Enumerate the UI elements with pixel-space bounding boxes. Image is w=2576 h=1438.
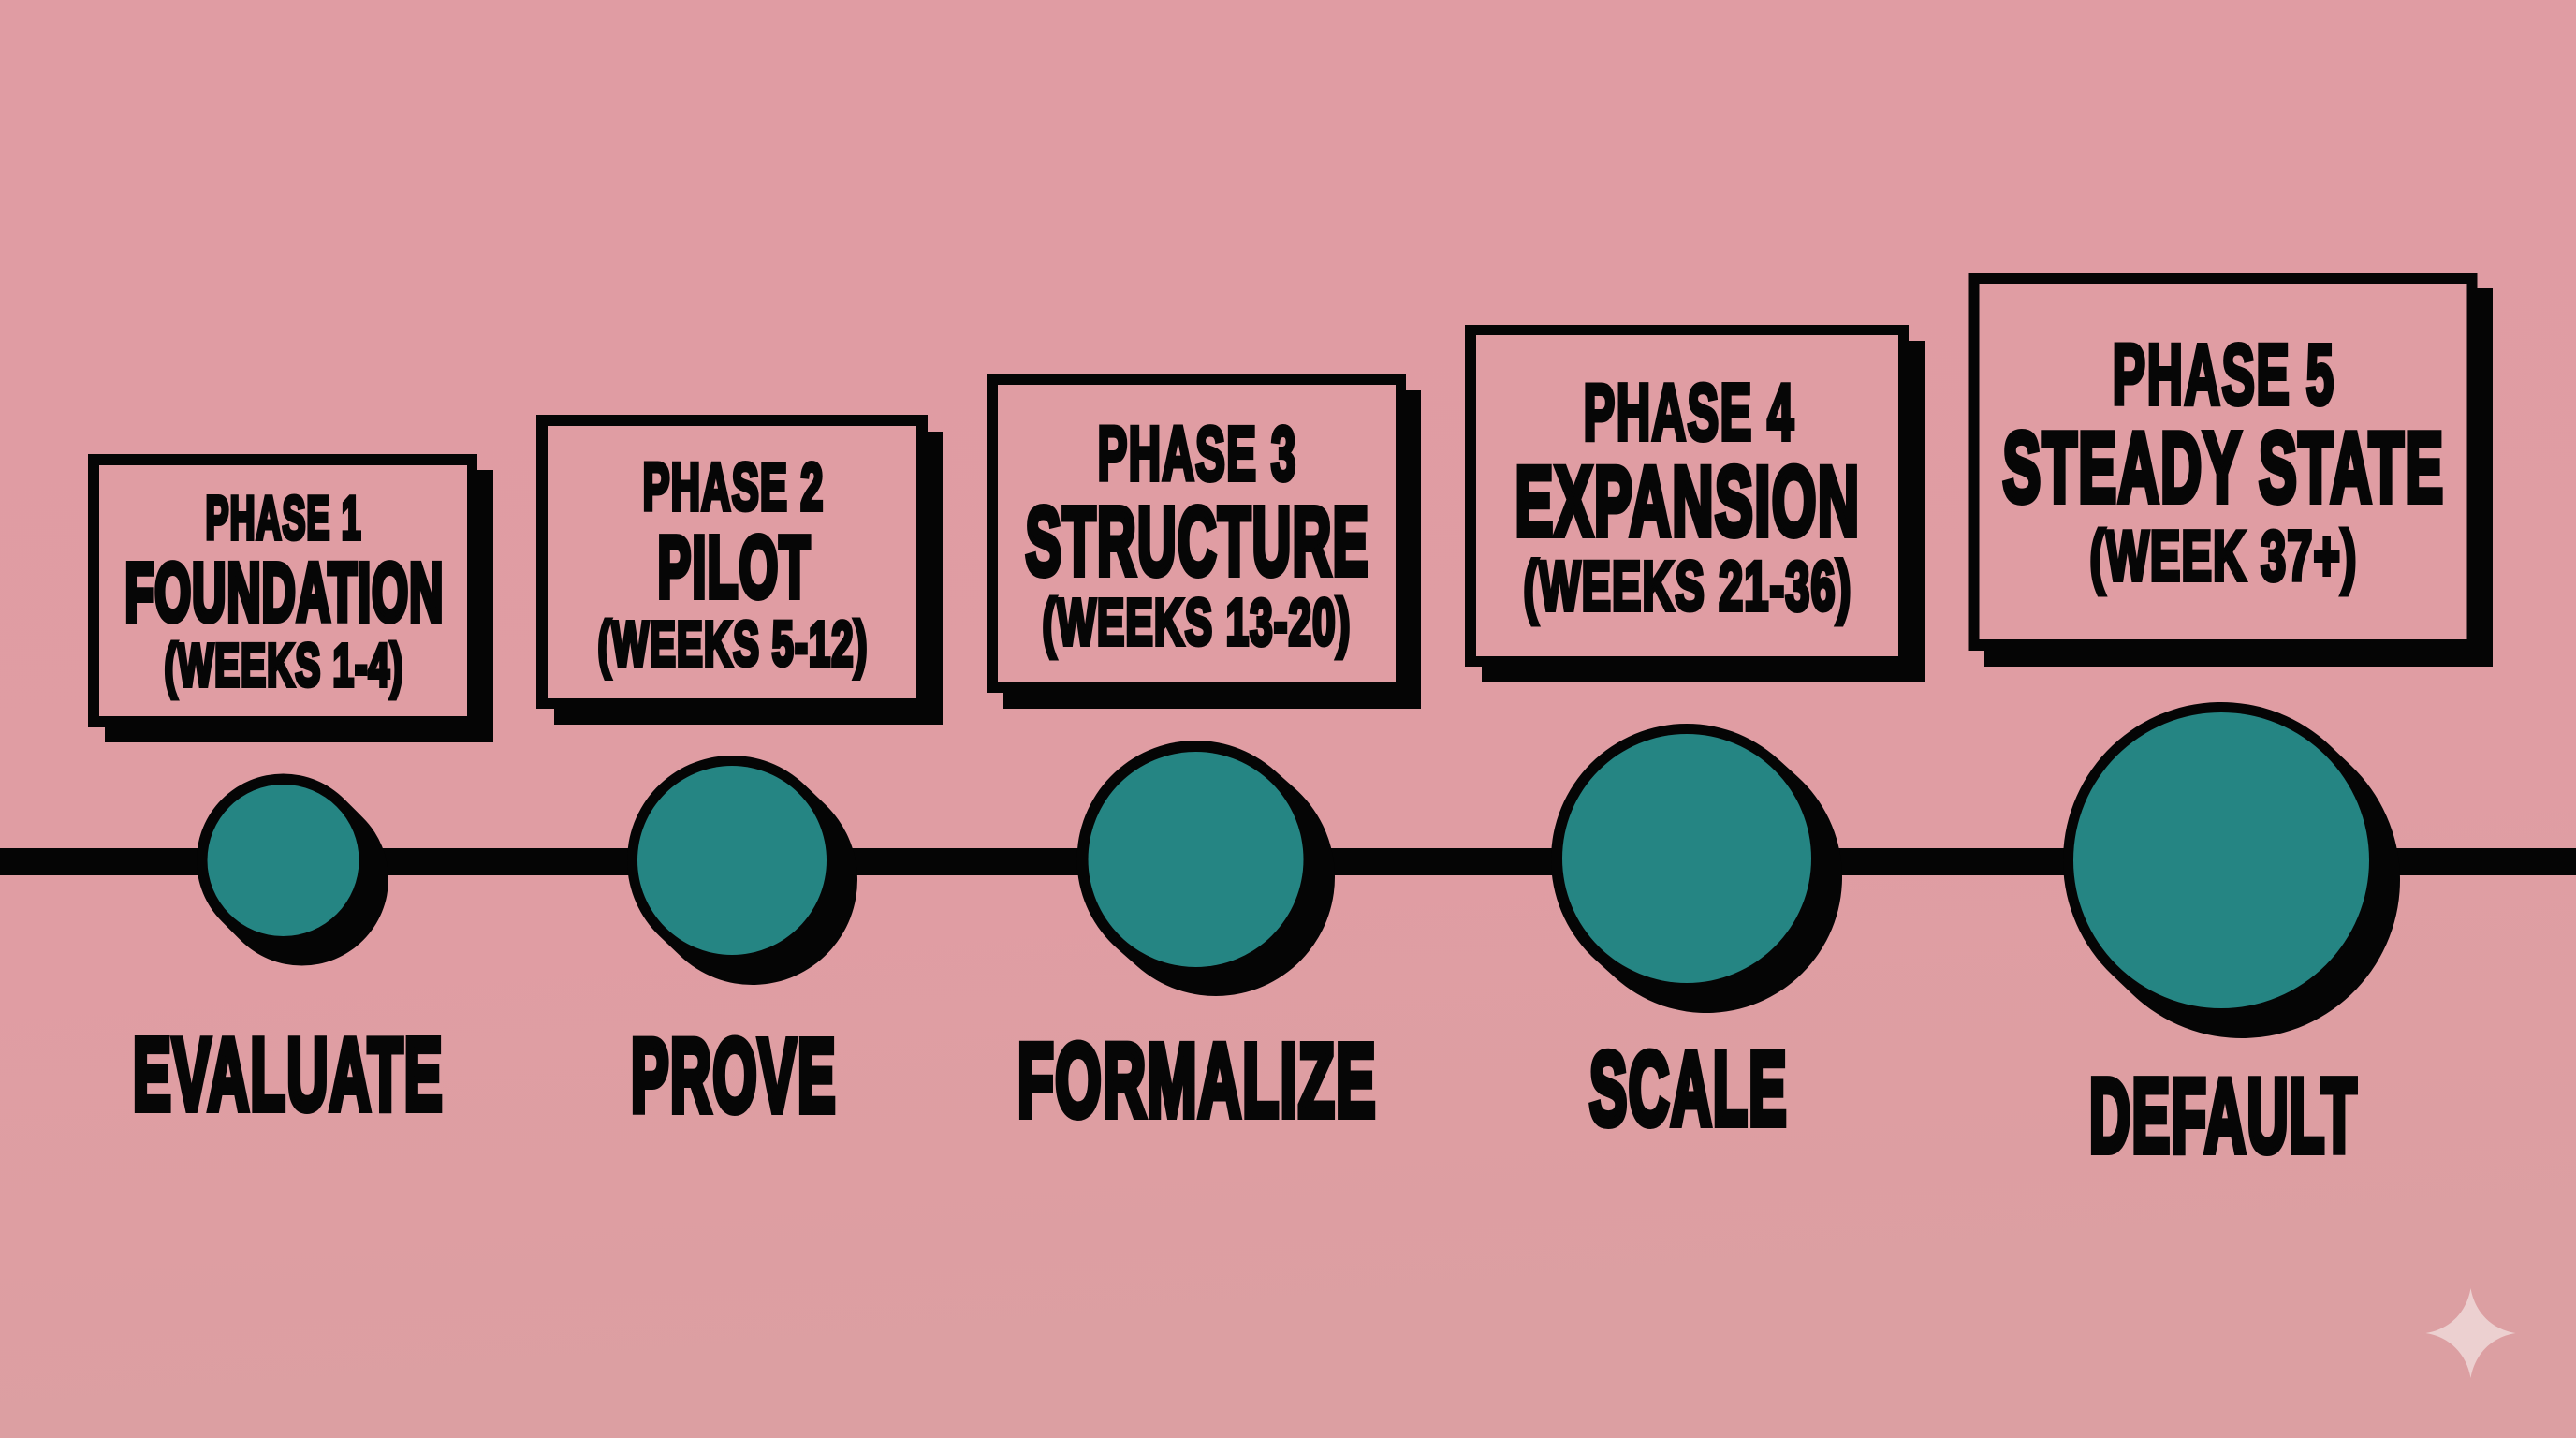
phase 4 label: SCALE	[1589, 1032, 1788, 1147]
phase 2 node	[637, 766, 827, 955]
phase 2 label: PROVE	[631, 1019, 837, 1134]
phase 3 weeks: (WEEKS 13-20)	[1043, 586, 1352, 659]
phase 4 number: PHASE 4	[1584, 367, 1795, 457]
phase 4 name: EXPANSION	[1515, 448, 1861, 556]
phase 2 weeks: (WEEKS 5-12)	[597, 610, 869, 680]
phase 4 node	[1562, 734, 1811, 983]
phase 3 label: FORMALIZE	[1017, 1023, 1377, 1138]
phase 5 group	[1968, 273, 2493, 1174]
phase 2 name: PILOT	[657, 519, 811, 616]
phase 5 number: PHASE 5	[2112, 328, 2334, 423]
icon: sparkle watermark	[2426, 1288, 2516, 1378]
phase 3 group	[987, 374, 1421, 1138]
phase 4 box	[1465, 325, 1925, 682]
phase 1 node	[208, 785, 359, 936]
phase 3 box	[987, 374, 1421, 709]
phase 5 weeks: (WEEK 37+)	[2089, 517, 2357, 595]
phase 2 number: PHASE 2	[642, 451, 824, 524]
phase 1 weeks: (WEEKS 1-4)	[165, 631, 404, 698]
timeline line	[0, 848, 2576, 875]
phase 3 number: PHASE 3	[1097, 412, 1297, 496]
phase 1 box	[88, 454, 493, 742]
phase 1 group	[88, 454, 493, 1132]
phase 1 name: FOUNDATION	[125, 547, 444, 638]
phase 4 weeks: (WEEKS 21-36)	[1524, 547, 1852, 625]
phase 1 number: PHASE 1	[206, 483, 361, 552]
phase 3 name: STRUCTURE	[1026, 487, 1370, 595]
phase 2 box	[536, 415, 943, 725]
phase 5 box	[1968, 273, 2493, 667]
phase 5 node	[2073, 712, 2369, 1008]
phase 1 label: EVALUATE	[133, 1018, 444, 1132]
phase 3 node	[1088, 752, 1303, 967]
phase 2 group	[536, 415, 943, 1134]
phase 4 group	[1465, 325, 1925, 1147]
phase 5 label: DEFAULT	[2089, 1057, 2358, 1174]
